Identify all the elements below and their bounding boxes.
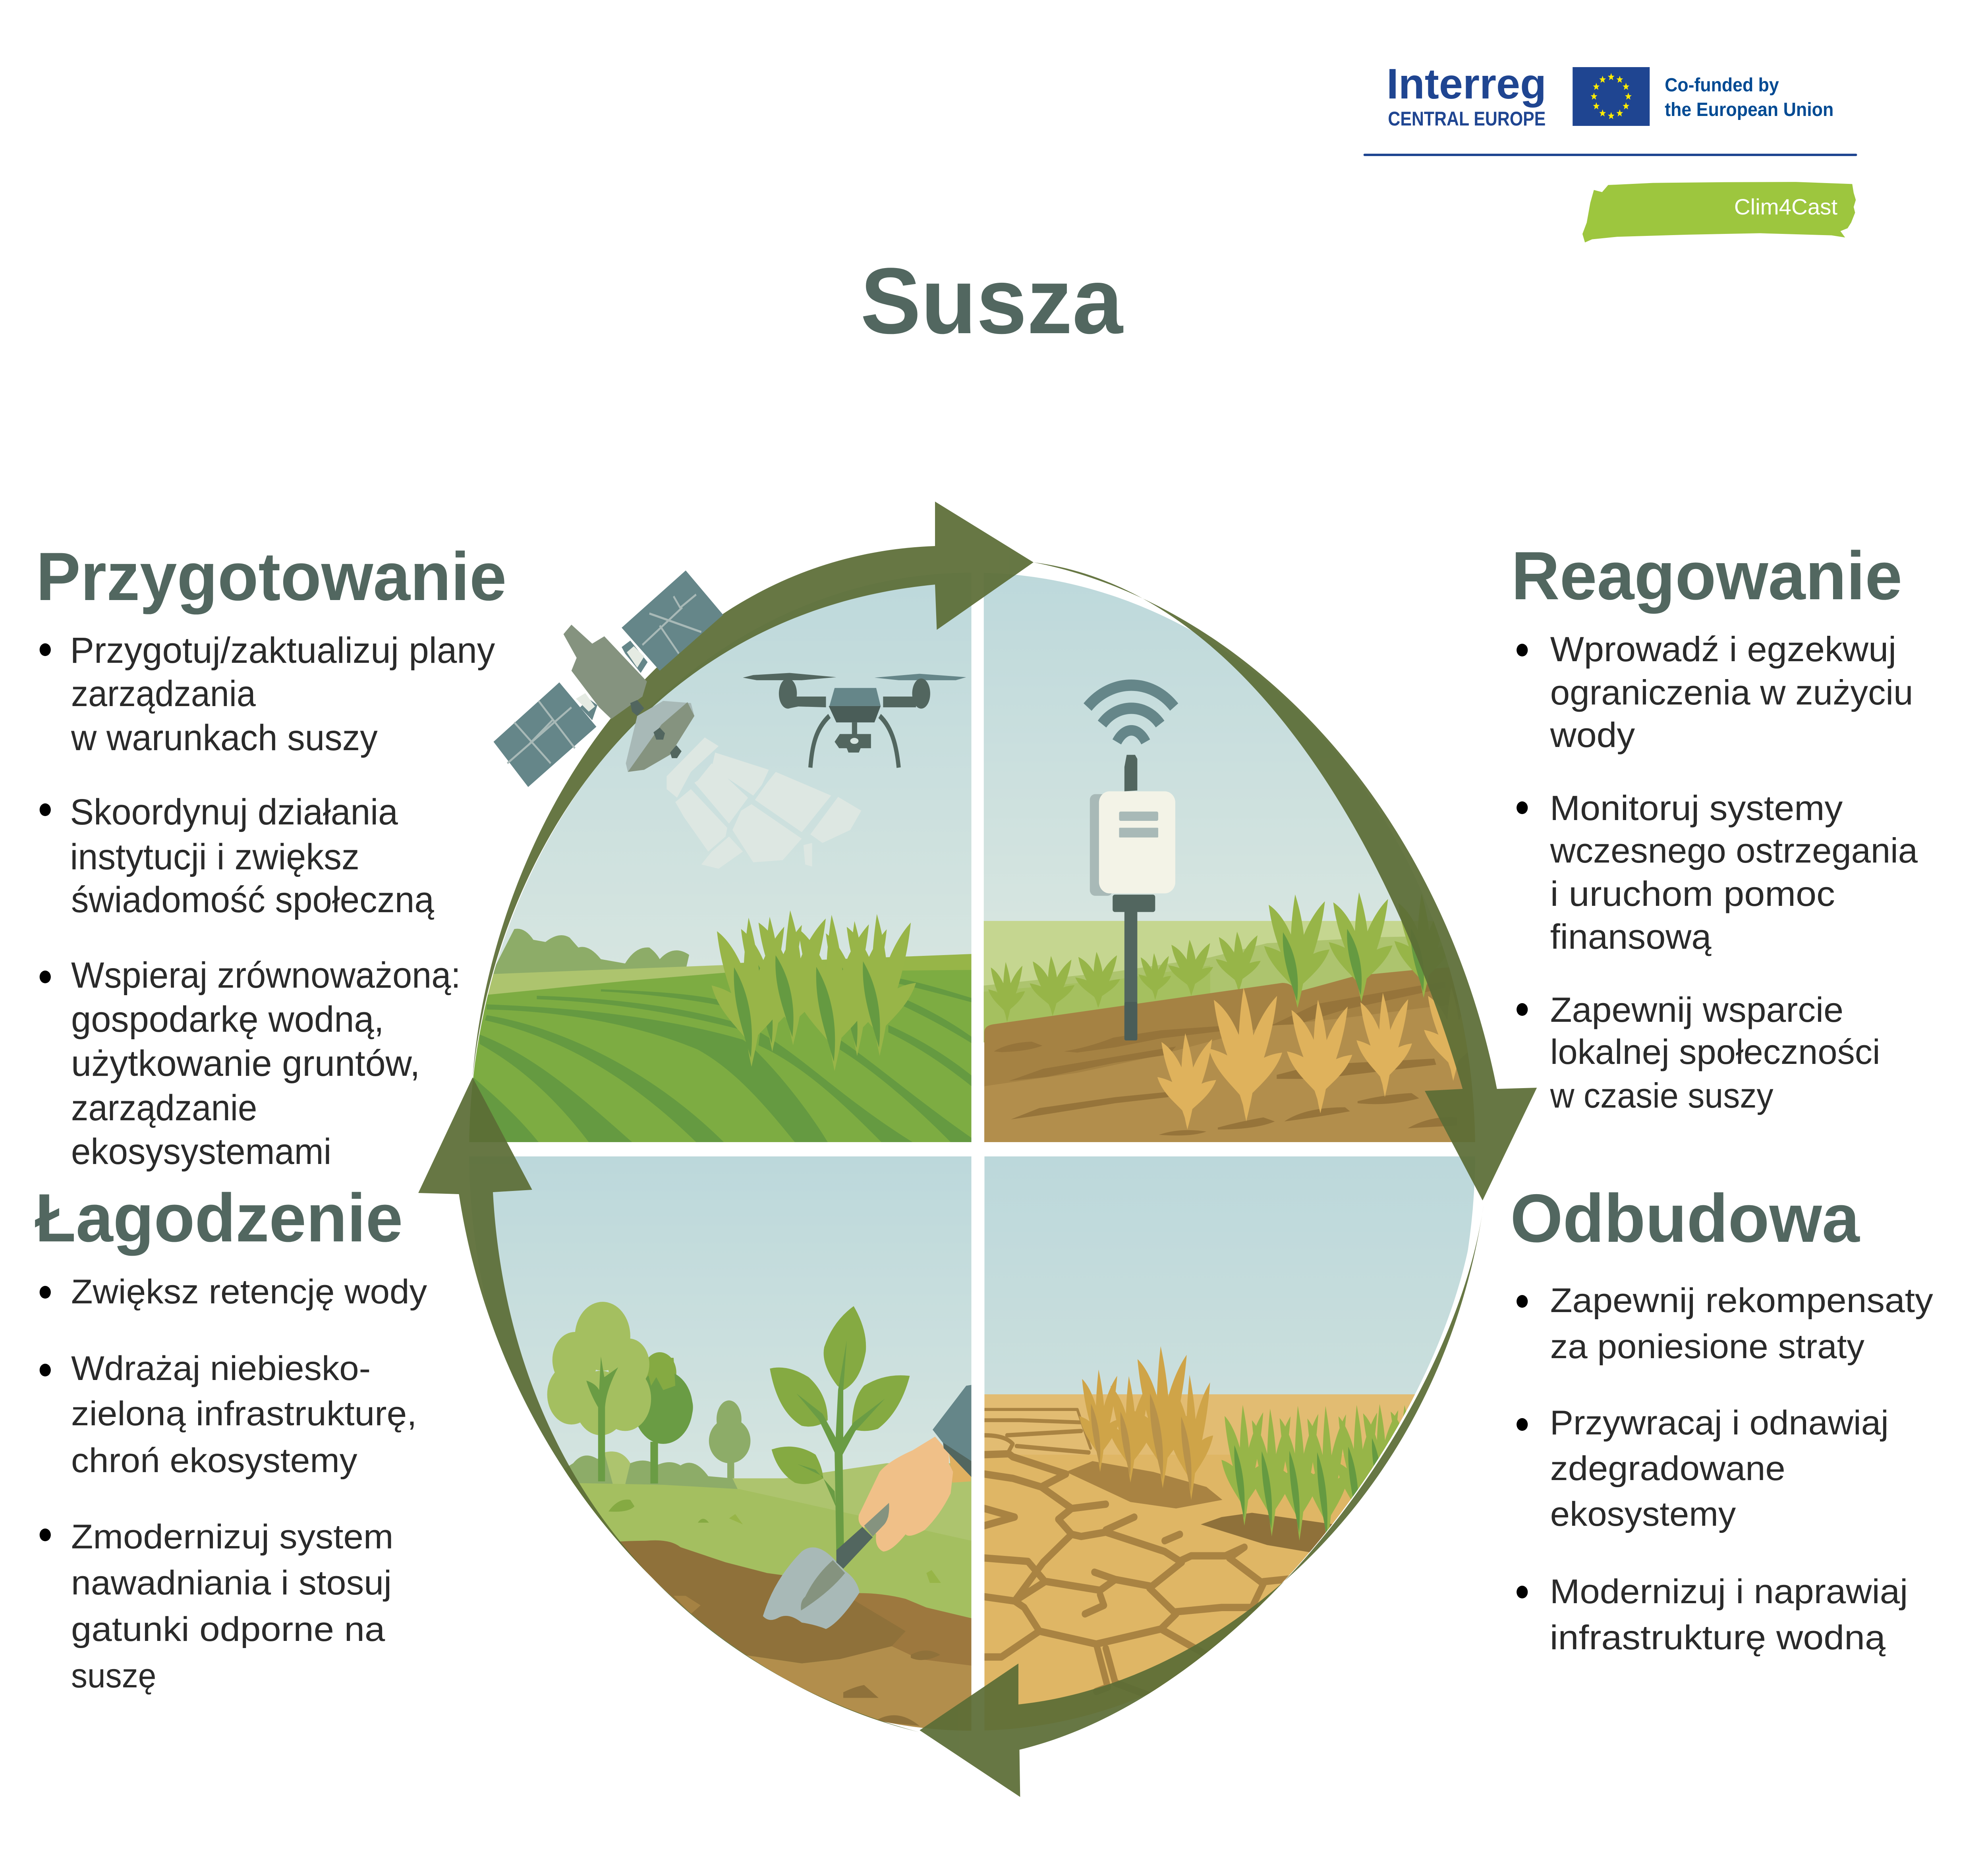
heading: Przygotowanie: Przygotowanie: [36, 538, 506, 615]
logo: Interreg Central Europe: CENTRAL EUROPE: [1388, 107, 1546, 130]
bullet: compensation: Zapewnij rekompensaty: [1550, 1282, 1933, 1320]
bullet: irrigation: [40, 1518, 393, 1695]
bullet: local support: lokalnej społeczności: [1550, 1032, 1880, 1071]
bullet: plans: w warunkach suszy: [71, 717, 378, 758]
co-funded text: Co-funded by: [1665, 74, 1779, 96]
bullet: restrictions: Wprowadź i egzekwuj: [1550, 629, 1896, 669]
bullet: blue-green infrastructure: [40, 1350, 417, 1480]
bullet: plans: zarządzania: [71, 673, 256, 714]
bullet: sustainable management: użytkowanie gruntów,: [71, 1043, 420, 1084]
logo: Interreg Central Europe: [1387, 60, 1546, 130]
panel text: Łagodzenie: [35, 1180, 427, 1695]
bullet: restoration: ekosystemy: [1550, 1496, 1736, 1533]
logo: Interreg Central Europe: Interreg: [1387, 60, 1546, 108]
bullet: restrictions: ograniczenia w zużyciu: [1550, 673, 1913, 712]
heading: Łagodzenie: Łagodzenie: [35, 1180, 403, 1256]
bullet: sustainable management: zarządzanie: [71, 1087, 257, 1128]
soil cracks: [984, 1409, 1305, 1696]
corn plants: [711, 910, 916, 1071]
header rule: [1364, 154, 1857, 156]
bullet: sustainable management: [40, 955, 461, 1172]
front soil: [984, 1002, 1476, 1144]
bullet: coordination: Skoordynuj działania: [70, 791, 398, 832]
bullet: blue-green infrastructure: zieloną infrastrukturę,: [71, 1395, 417, 1433]
panel: mitigation planting: [456, 1156, 972, 1743]
plant shadows: [1066, 1461, 1223, 1508]
heading: Odbudowa: Odbudowa: [1510, 1180, 1860, 1256]
light field band: [487, 965, 732, 996]
bullet: local support: [1517, 990, 1880, 1115]
bullet: irrigation: suszę: [71, 1657, 156, 1695]
bullet: early warning: wczesnego ostrzegania: [1550, 831, 1918, 870]
panel: response sensor field: [982, 556, 1481, 1144]
arrow: recovery to mitigation: [920, 1205, 1484, 1797]
back hill: [732, 1463, 972, 1545]
soil cracks: [994, 982, 1457, 1135]
bullet: blue-green infrastructure: chroń ekosystemy: [71, 1442, 357, 1480]
panel: preparedness field: [456, 556, 972, 1142]
badge: Clim4Cast brush: [1582, 182, 1856, 243]
seedling: [770, 1306, 910, 1556]
bullet: coordination: [40, 791, 435, 920]
arrow: preparedness to response: [473, 502, 1034, 1077]
badge: Clim4Cast brush: Clim4Cast: [1734, 195, 1837, 220]
icon: satellite: [493, 570, 723, 787]
bullet: restoration: [1517, 1404, 1889, 1533]
co-funded text: the European Union: [1665, 99, 1833, 120]
bullet: sustainable management: ekosysystemami: [71, 1131, 331, 1172]
bullet: local support: w czasie suszy: [1550, 1076, 1773, 1115]
white cross dividers: [456, 556, 1507, 1747]
bullet: restoration: Przywracaj i odnawiaj: [1550, 1404, 1889, 1442]
heading: Reagowanie: Reagowanie: [1511, 538, 1902, 614]
bullet: early warning: i uruchom pomoc: [1550, 874, 1835, 913]
icon: drone: [743, 673, 966, 768]
bullet: irrigation: nawadniania i stosuj: [71, 1564, 392, 1602]
field furrows: [469, 978, 972, 1142]
bullet: coordination: świadomość społeczną: [71, 879, 435, 920]
soil: [837, 1593, 972, 1735]
big sprouts: [1264, 892, 1452, 1008]
panel text: Reagowanie: [1511, 538, 1918, 1115]
bullet: water infrastructure: [1517, 1573, 1908, 1657]
bullet: irrigation: gatunki odporne na: [71, 1611, 385, 1648]
bullet: restrictions: [1517, 629, 1913, 755]
bullet: restoration: zdegradowane: [1550, 1450, 1785, 1488]
dark tree: [634, 1352, 693, 1484]
panel: recovery cracked soil: [982, 1156, 1480, 1739]
small tree: [709, 1400, 750, 1478]
bullet: early warning: Monitoruj systemy: [1550, 788, 1843, 828]
co-funded text: [1665, 74, 1833, 120]
bullet: retention: Zwiększ retencję wody: [71, 1273, 427, 1311]
bullet: restrictions: wody: [1550, 715, 1635, 755]
panel text: Przygotowanie: [36, 538, 506, 1172]
bullet: plans: Przygotuj/zaktualizuj plany: [70, 630, 495, 671]
icon: EU flag: [1573, 67, 1650, 126]
panel text: Odbudowa: [1510, 1180, 1933, 1657]
cycle illustration: [456, 556, 1481, 1743]
bullet: local support: Zapewnij wsparcie: [1550, 990, 1843, 1029]
bullet: sustainable management: gospodarkę wodną,: [71, 999, 384, 1040]
bullet: irrigation: Zmodernizuj system: [71, 1518, 393, 1556]
bullet: water infrastructure: Modernizuj i naprawiaj: [1550, 1573, 1908, 1611]
dry ground: [982, 1394, 1480, 1739]
grass: [490, 1481, 972, 1691]
title: Susza: [860, 249, 1124, 353]
trowel and hand: [763, 1385, 972, 1629]
bullet: coordination: instytucji i zwiększ: [70, 836, 359, 877]
light tree: [547, 1302, 651, 1481]
bullet: plans: [40, 630, 495, 758]
light back tree bushes: [553, 1451, 738, 1489]
arrow: response to recovery: [1034, 562, 1537, 1200]
back field: [982, 921, 1476, 1042]
satellite imagery footprint: [667, 737, 861, 869]
bullet: early warning: finansową: [1550, 917, 1712, 956]
bullet: blue-green infrastructure: Wdrażaj niebiesko-: [71, 1350, 371, 1388]
dry sprouts: [1157, 987, 1481, 1129]
dry plants: [1079, 1346, 1213, 1500]
rear soil: [984, 965, 1476, 1087]
bullet: water infrastructure: infrastrukturę wodną: [1550, 1619, 1886, 1657]
arrow: mitigation to preparedness: [418, 1077, 920, 1732]
bullet: compensation: [1517, 1282, 1933, 1366]
bullet: compensation: za poniesione straty: [1550, 1328, 1864, 1366]
back sprouts: [988, 932, 1261, 1022]
distant trees: [490, 929, 689, 977]
green field: [469, 970, 972, 1142]
icon: field sensor with wifi: [1088, 685, 1175, 1040]
cycle arrows: [418, 502, 1537, 1797]
bullet: sustainable management: Wspieraj zrównoważoną:: [71, 955, 461, 996]
bullet: early warning: [1517, 788, 1918, 956]
green plants: [1221, 1404, 1422, 1545]
